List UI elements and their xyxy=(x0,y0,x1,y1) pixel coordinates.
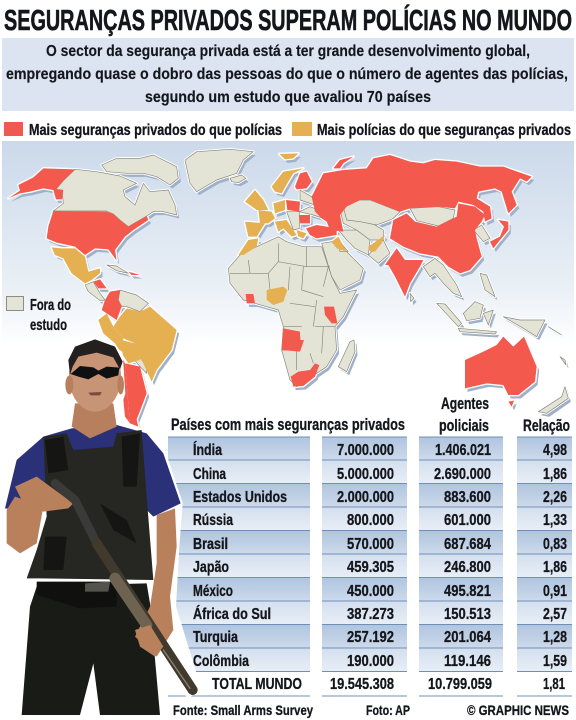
table: country names: TOTAL MUNDO xyxy=(212,676,302,693)
table: private security numbers: 257.192 xyxy=(347,629,394,646)
intro text panel xyxy=(2,38,574,111)
table: private security numbers: 570.000 xyxy=(347,536,394,553)
world map xyxy=(8,149,571,430)
table: ratio numbers: 1,81 xyxy=(543,676,565,693)
table: ratio numbers: 0,91 xyxy=(543,583,567,600)
map: countries outside the study xyxy=(53,149,568,413)
table: country names xyxy=(193,440,302,693)
table: police numbers: 883.600 xyxy=(444,489,491,506)
sunglasses xyxy=(71,366,119,379)
table headers xyxy=(171,395,570,435)
table: country names: México xyxy=(193,583,233,600)
table: ratio numbers: 4,98 xyxy=(543,442,567,459)
table: ratio numbers: 1,86 xyxy=(543,559,567,576)
table: private security numbers: 459.305 xyxy=(347,559,394,576)
table: ratio numbers: 2,57 xyxy=(543,606,567,623)
table: police numbers: 201.064 xyxy=(444,629,491,646)
table: police numbers: 10.799.059 xyxy=(428,676,492,693)
table: private security numbers xyxy=(330,442,394,693)
belt xyxy=(37,582,117,608)
table: private security numbers: 19.545.308 xyxy=(330,676,394,693)
legend: outside study xyxy=(6,296,71,334)
left arm xyxy=(7,497,43,553)
table: country names: Colômbia xyxy=(193,653,249,670)
footer credits: Fonte: Small Arms Survey xyxy=(173,702,313,718)
legend: more private security: Mais seguranças privados do que polícias xyxy=(29,122,282,139)
table headers: Agentes xyxy=(441,395,489,413)
table: private security numbers: 5.000.000 xyxy=(337,466,394,483)
right arm xyxy=(135,508,177,657)
photo: security guard with shotgun xyxy=(5,339,198,715)
table: police numbers xyxy=(428,442,492,693)
table: country names: Estados Unidos xyxy=(193,489,287,506)
intro text panel: segundo um estudo que avaliou 70 países xyxy=(145,89,431,106)
table: country names: Índia xyxy=(193,440,222,459)
table: ratio numbers: 1,59 xyxy=(543,653,567,670)
table: country names: China xyxy=(193,466,226,483)
table: private security numbers: 387.273 xyxy=(347,606,394,623)
hand on shotgun xyxy=(135,625,163,657)
table: police numbers: 687.684 xyxy=(444,536,491,553)
map: country borders xyxy=(230,243,335,370)
tactical vest xyxy=(27,430,153,580)
table: police numbers: 119.146 xyxy=(444,653,491,670)
mouth xyxy=(88,392,102,395)
footer credits: Foto: AP xyxy=(366,702,410,718)
table: country names: África do Sul xyxy=(193,604,271,623)
table headers: Países com mais seguranças privados xyxy=(171,416,405,434)
table: private security numbers: 2.000.000 xyxy=(337,489,394,506)
table: private security numbers: 190.000 xyxy=(347,653,394,670)
table: ratio numbers: 1,28 xyxy=(543,629,567,646)
table: country names: Rússia xyxy=(193,512,233,529)
table: country names: Japão xyxy=(193,559,229,576)
trousers xyxy=(22,583,160,715)
white halo xyxy=(5,340,198,715)
table headers: policiais xyxy=(439,417,489,435)
table: police numbers: 150.513 xyxy=(444,606,491,623)
table: ratio numbers xyxy=(543,442,567,693)
face xyxy=(69,342,121,412)
table: private security numbers: 800.000 xyxy=(347,512,394,529)
table rows xyxy=(168,437,572,696)
footer credits xyxy=(173,702,569,718)
hand holding the shotgun xyxy=(15,477,73,512)
table: police numbers: 246.800 xyxy=(444,559,491,576)
map: countries with more private security xyxy=(8,155,537,427)
hair xyxy=(68,339,123,375)
map background xyxy=(2,141,574,346)
table: ratio numbers: 2,26 xyxy=(543,489,567,506)
neck xyxy=(72,403,117,438)
table: ratio numbers: 1,33 xyxy=(543,512,567,529)
table: police numbers: 495.821 xyxy=(444,583,491,600)
table: police numbers: 1.406.021 xyxy=(435,442,491,459)
legend: outside study: Fora do xyxy=(30,297,71,314)
legend: outside study: estudo xyxy=(30,317,67,334)
table: ratio numbers: 0,83 xyxy=(543,536,567,553)
table: private security numbers: 7.000.000 xyxy=(337,442,394,459)
table: police numbers: 601.000 xyxy=(444,512,491,529)
table: private security numbers: 450.000 xyxy=(347,583,394,600)
blue shirt xyxy=(5,425,181,517)
map: countries with more police xyxy=(52,153,385,382)
table: ratio numbers: 1,86 xyxy=(543,466,567,483)
table: country names: Turquia xyxy=(193,629,238,646)
shotgun xyxy=(55,483,193,690)
table: country names: Brasil xyxy=(193,536,228,553)
table: police numbers: 2.690.000 xyxy=(434,466,491,483)
